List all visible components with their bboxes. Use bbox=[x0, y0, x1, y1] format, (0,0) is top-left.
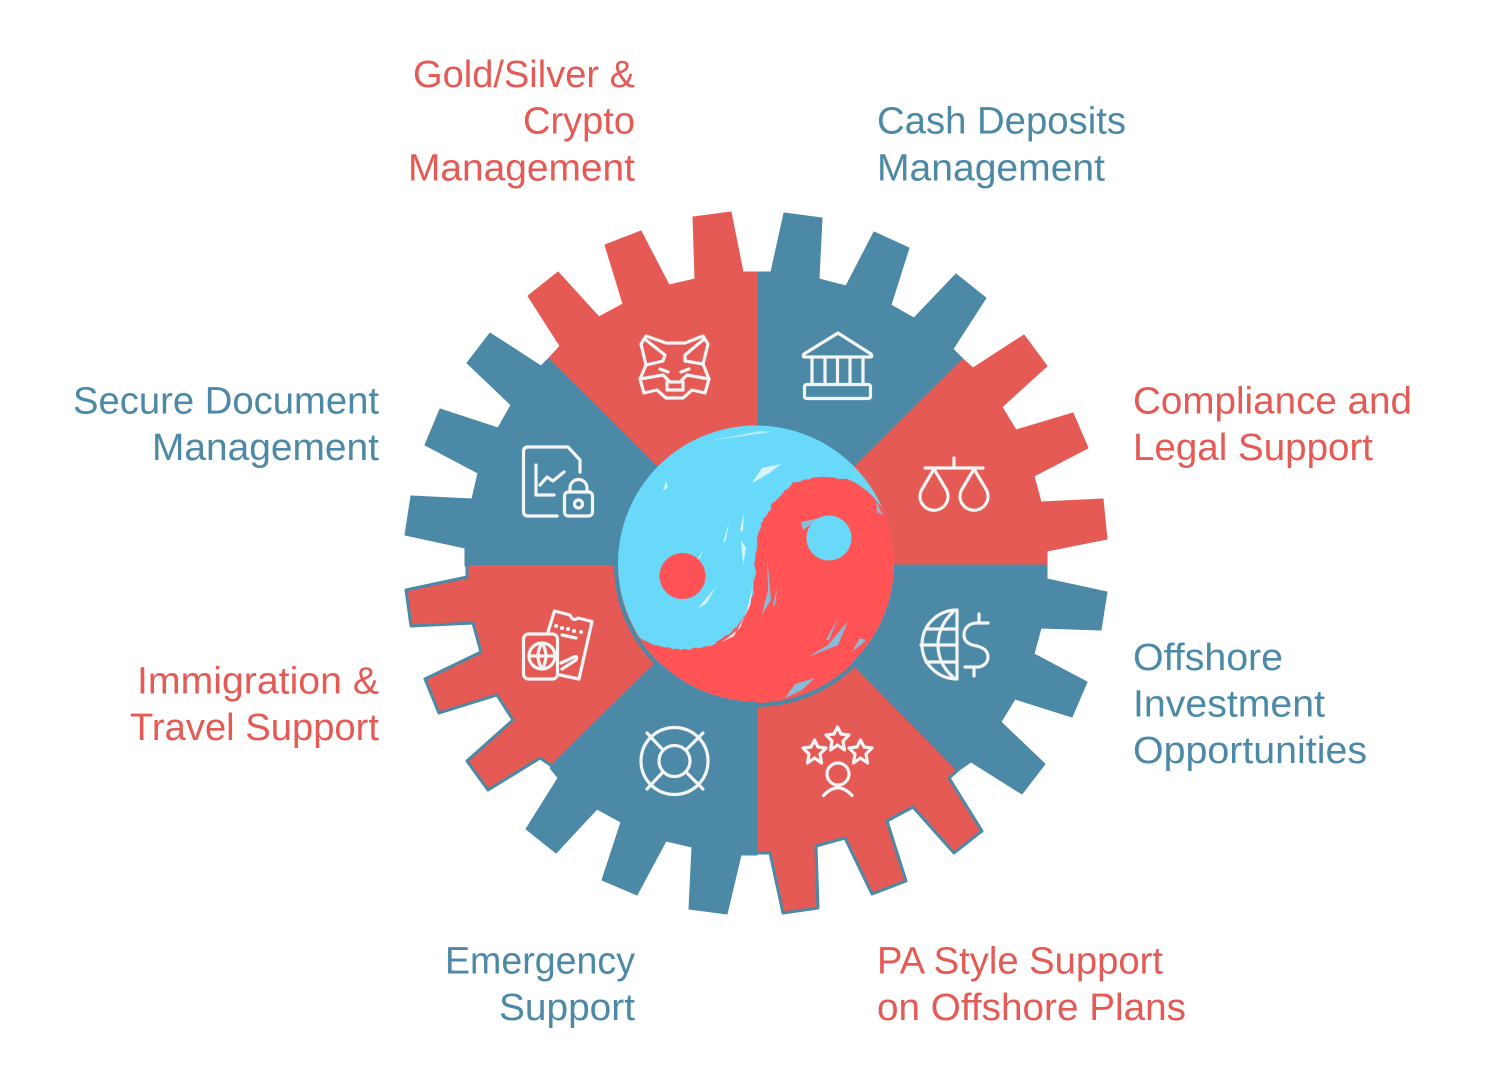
icon: bank bbox=[803, 333, 872, 398]
label: gold silver crypto bbox=[408, 54, 635, 190]
yin yang red dot bbox=[660, 553, 706, 599]
label: cash deposits: Cash Deposits bbox=[877, 100, 1126, 142]
segment: PA style support gear teeth bbox=[756, 564, 982, 913]
label: secure document: Secure Document bbox=[73, 380, 379, 422]
segment: emergency support gear teeth bbox=[526, 564, 757, 914]
yin yang centre bbox=[618, 426, 900, 720]
yin yang light half bbox=[618, 426, 894, 702]
label: cash deposits bbox=[877, 100, 1126, 190]
icon: star rated person bbox=[803, 727, 872, 796]
label: offshore investment: Offshore bbox=[1133, 637, 1283, 679]
icon: passport and ticket bbox=[524, 611, 592, 679]
label: immigration travel: Immigration & bbox=[137, 660, 379, 702]
icon: locked document chart bbox=[524, 447, 592, 516]
label: emergency support: Support bbox=[499, 987, 635, 1029]
label: gold silver crypto: Gold/Silver & bbox=[413, 54, 635, 96]
label: emergency support bbox=[445, 940, 635, 1029]
label: cash deposits: Management bbox=[877, 148, 1105, 190]
label: PA style support: on Offshore Plans bbox=[877, 987, 1186, 1029]
label: compliance bbox=[1133, 380, 1412, 469]
yin yang red half bbox=[640, 476, 894, 702]
label: PA style support bbox=[877, 940, 1186, 1029]
label: offshore investment: Opportunities bbox=[1133, 730, 1367, 772]
label: compliance: Legal Support bbox=[1133, 427, 1373, 469]
icon: globe and dollar bbox=[921, 610, 988, 679]
icon: lifebuoy bbox=[641, 728, 708, 794]
label: gold silver crypto: Management bbox=[408, 148, 635, 190]
label: secure document: Management bbox=[152, 427, 379, 469]
yin yang blue dot bbox=[806, 516, 852, 560]
gear wheel bbox=[405, 212, 1107, 914]
segment: cash deposits gear teeth bbox=[757, 213, 986, 564]
segment: immigration travel gear teeth bbox=[406, 564, 757, 790]
label: gold silver crypto: Crypto bbox=[523, 100, 635, 142]
label: immigration travel bbox=[130, 660, 379, 749]
rim under yin yang circle bbox=[616, 565, 896, 705]
segment: secure document gear teeth bbox=[405, 333, 757, 566]
label: PA style support: PA Style Support bbox=[877, 940, 1163, 982]
label: offshore investment bbox=[1133, 637, 1367, 772]
label: immigration travel: Travel Support bbox=[130, 707, 379, 749]
yin yang brush streaks bbox=[663, 431, 883, 698]
label: compliance: Compliance and bbox=[1133, 380, 1412, 422]
segment: gold silver crypto gear teeth bbox=[528, 212, 757, 564]
icon: fox bbox=[640, 336, 709, 398]
icon: scales bbox=[920, 458, 988, 510]
label: secure document bbox=[73, 380, 379, 469]
label: emergency support: Emergency bbox=[445, 940, 635, 982]
segment: compliance gear teeth bbox=[757, 335, 1107, 564]
label: offshore investment: Investment bbox=[1133, 684, 1325, 726]
segment: offshore investment gear teeth bbox=[757, 565, 1107, 794]
